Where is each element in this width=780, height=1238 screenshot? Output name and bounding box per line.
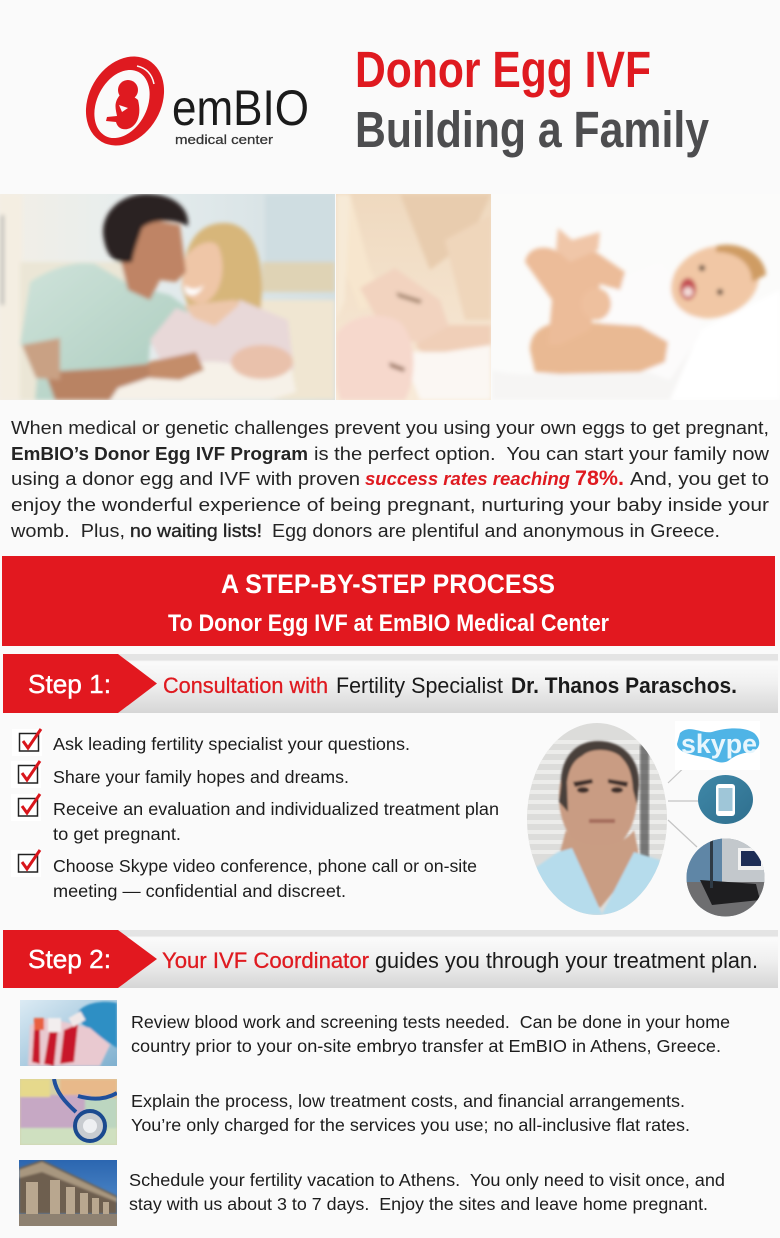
intro paragraph bbox=[10, 417, 770, 541]
check item 3: to get pregnant. bbox=[53, 824, 181, 844]
step 1 heading doctor: Dr. Thanos Paraschos. bbox=[511, 673, 737, 698]
success rates highlight: success rates reaching bbox=[365, 468, 570, 489]
line 3: using a donor egg and IVF with proven bbox=[11, 468, 360, 489]
check item 3: Receive an evaluation and individualized treatment plan bbox=[53, 799, 499, 819]
connector lines bbox=[668, 757, 698, 847]
step 1 header bbox=[3, 654, 778, 713]
step 2 item 1 text bbox=[131, 1012, 730, 1056]
check item 1: Ask leading fertility specialist your questions. bbox=[53, 734, 410, 754]
check item 2 bbox=[11, 761, 349, 788]
step 2 item 2 text: Explain the process, low treatment costs, and financial arrangements. bbox=[131, 1091, 685, 1111]
photo: laughing baby on white bedding bbox=[522, 227, 769, 378]
image: euro notes and stethoscope bbox=[20, 1079, 117, 1145]
step 2 heading red: Your IVF Coordinator bbox=[162, 948, 369, 973]
line 4: enjoy the wonderful experience of being pregnant, nurturing your baby inside your bbox=[11, 494, 769, 515]
step 1 arrow bbox=[3, 654, 157, 713]
logo tagline: medical center bbox=[175, 132, 274, 147]
step 1 heading red: Consultation with bbox=[163, 673, 328, 698]
banner subheading: To Donor Egg IVF at EmBIO Medical Center bbox=[168, 610, 609, 637]
photo: couple with newborn bbox=[0, 194, 335, 400]
title line 2: Building a Family bbox=[355, 101, 710, 158]
check item 4 bbox=[11, 850, 477, 901]
checklist bbox=[11, 729, 499, 901]
line 2: EmBIO program: EmBIO’s Donor Egg IVF Program bbox=[11, 443, 308, 464]
step 2 item 2 text: You’re only charged for the services you use; no all-inclusive flat rates. bbox=[131, 1115, 690, 1135]
step 2 item 1 text: country prior to your on-site embryo transfer at EmBIO in Athens, Greece. bbox=[131, 1036, 721, 1056]
logo wordmark: emBIO bbox=[172, 80, 309, 136]
icon: red ring with fetus bbox=[70, 42, 180, 160]
banner: step-by-step process bbox=[2, 556, 775, 646]
logo: emBIO medical center bbox=[70, 42, 309, 160]
check item 1 bbox=[12, 729, 410, 756]
line 1: When medical or genetic challenges prevent you using your own eggs to get pregnant, bbox=[11, 417, 769, 438]
icon: smartphone bbox=[698, 775, 753, 824]
no waiting lists: no waiting lists! bbox=[130, 520, 262, 541]
check item 4: meeting — confidential and discreet. bbox=[53, 881, 346, 901]
image: blood test tubes bbox=[20, 1000, 117, 1066]
step 1 label: Step 1: bbox=[28, 669, 111, 699]
line 5 remainder: Egg donors are plentiful and anonymous in Greece. bbox=[272, 520, 720, 541]
line 2 remainder: is the perfect option. You can start your family now bbox=[314, 443, 770, 464]
photo: Dr. Thanos Paraschos bbox=[525, 723, 670, 915]
image: Parthenon bbox=[19, 1160, 117, 1226]
step 2 item 1 text: Review blood work and screening tests needed. Can be done in your home bbox=[131, 1012, 730, 1032]
title bbox=[355, 41, 710, 158]
step 2 item 2 text bbox=[131, 1091, 690, 1135]
step 2 header bbox=[3, 930, 778, 988]
check item 4: Choose Skype video conference, phone call or on-site bbox=[53, 856, 477, 876]
step 2 arrow bbox=[3, 930, 157, 988]
step 2 item 3 text: stay with us about 3 to 7 days. Enjoy the sites and leave home pregnant. bbox=[129, 1194, 708, 1214]
banner heading: A STEP-BY-STEP PROCESS bbox=[221, 569, 555, 599]
icon: skype: skype bbox=[681, 729, 757, 759]
step 2 item 3 text: Schedule your fertility vacation to Athens. You only need to visit once, and bbox=[129, 1170, 725, 1190]
photo: mother kissing baby bbox=[336, 194, 491, 400]
step 1 heading black: Fertility Specialist bbox=[336, 673, 504, 698]
icon: skype bbox=[675, 721, 760, 770]
78 percent: 78%. bbox=[575, 467, 624, 490]
check item 2: Share your family hopes and dreams. bbox=[53, 767, 349, 787]
check item 3 bbox=[11, 794, 499, 844]
step 2 heading black: guides you through your treatment plan. bbox=[375, 948, 758, 973]
photo: clinic office in circle bbox=[686, 838, 766, 918]
title line 1: Donor Egg IVF bbox=[355, 41, 651, 98]
line 3 remainder: And, you get to bbox=[630, 468, 769, 489]
step 2 label: Step 2: bbox=[28, 944, 111, 974]
step 2 item 3 text bbox=[129, 1170, 725, 1214]
line 5: womb. Plus, bbox=[10, 520, 125, 541]
